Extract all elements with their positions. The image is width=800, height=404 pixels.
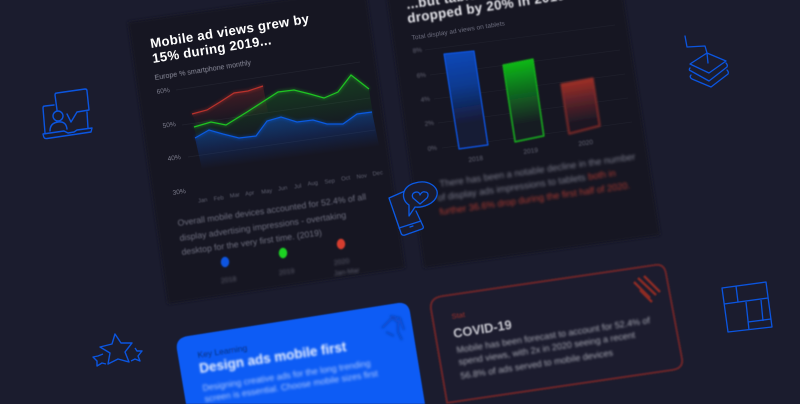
COVID text: spend views, with 2x in 2020 seeing a recent [458,330,636,367]
icon: stacked layers [685,36,728,87]
x axis months: Apr [245,190,255,198]
green line [194,75,369,127]
y axis labels: 30% [172,188,186,197]
bar chart [425,25,632,149]
x axis months: Jan [198,197,208,205]
icon: three stars [93,334,142,366]
description text [437,152,636,217]
icon: phone with heart bubble [389,182,437,235]
y axis labels: 4% [420,96,431,104]
blue line [195,112,372,138]
panel: mobile ad views card [128,0,405,304]
blue area [195,112,380,178]
description text: desktop for the very first time. (2019) [181,227,322,257]
y axis labels: 2% [424,120,435,128]
y axis labels: 50% [162,121,176,130]
legend labels [221,258,361,285]
description text: There has been a notable decline in the number [439,152,636,189]
description text: Overall mobile devices accounted for 52.4% of all [177,192,367,228]
red area [192,86,268,128]
x axis months: Oct [341,175,351,183]
learning text: Designing creative ads for the long trending [202,358,371,393]
x axis months: Nov [356,173,368,181]
red line [192,86,263,114]
panel: key learning card [177,303,425,404]
x axis months: Feb [213,195,224,203]
y axis labels: 40% [167,154,181,163]
x axis months: Jun [278,185,288,193]
x axis months: Dec [372,170,384,178]
legend labels: Jan-Mar [334,267,361,278]
y axis labels [412,47,438,153]
description text: of display ads impressions to tablets both in [437,168,616,203]
green area [194,75,376,160]
description text: display advertising impressions - overtaking [179,210,347,243]
COVID text [456,315,651,381]
line glows [192,75,372,138]
x axis months: May [261,188,273,196]
COVID text: Mobile has been forecast to account for 52.4% of [456,315,651,355]
x axis years: 2019 [523,147,539,156]
line chart [176,62,380,178]
legend dot: 2018 [221,257,229,267]
icon: blurred hand [382,316,404,340]
panel: COVID-19 card [431,265,682,403]
y axis labels [156,87,186,197]
bar: 2019 green [503,59,544,142]
legend dot: 2019 [279,248,287,258]
heading: COVID-19: COVID-19 [452,317,513,341]
legend [221,239,361,285]
stat label: Stat [451,310,467,321]
x axis months [198,170,384,205]
bar: 2018 blue [444,51,488,149]
panel: tablet ad views card [386,0,660,268]
icon: layout grid [722,282,772,332]
legend labels: 2018 [221,276,237,285]
COVID text: 56.8% of ads served to mobile devices [460,347,614,381]
description text [177,192,367,257]
y axis labels: 6% [416,72,427,80]
red highlighted text: further 36.6% drop during the first half of 2020. [439,180,631,217]
y axis labels: 8% [412,47,423,55]
bar: 2020 red [561,78,600,134]
x axis months: Aug [307,180,318,188]
heading: mobile ad views: Mobile ad views grew by [149,11,311,51]
x axis months: Sep [324,178,335,186]
key learning label: Key Learning [197,343,248,360]
y axis labels: 60% [156,87,170,96]
heading: design ads mobile first: Design ads mobile first [198,339,348,376]
y axis labels: 0% [427,145,438,153]
x axis years [468,139,594,164]
legend dot: 2020 [337,239,345,249]
heading: mobile ad views: 15% during 2019... [151,32,272,66]
x axis months: Jul [294,183,302,191]
x axis years: 2020 [578,139,594,148]
legend labels: 2019 [279,268,295,277]
icon: blurred virus [634,276,660,302]
legend labels: 2020 [334,258,350,267]
x axis years: 2018 [468,155,484,164]
learning text: screen is essential. Choose mobile sizes first [204,368,379,404]
subtitle: Europe smartphone: Europe % smartphone monthly [154,59,252,82]
icon: laptop with speech bubble [43,89,92,139]
x axis months: Mar [229,192,240,200]
subtitle: tablets: Total display ad views on tablets [411,20,506,42]
